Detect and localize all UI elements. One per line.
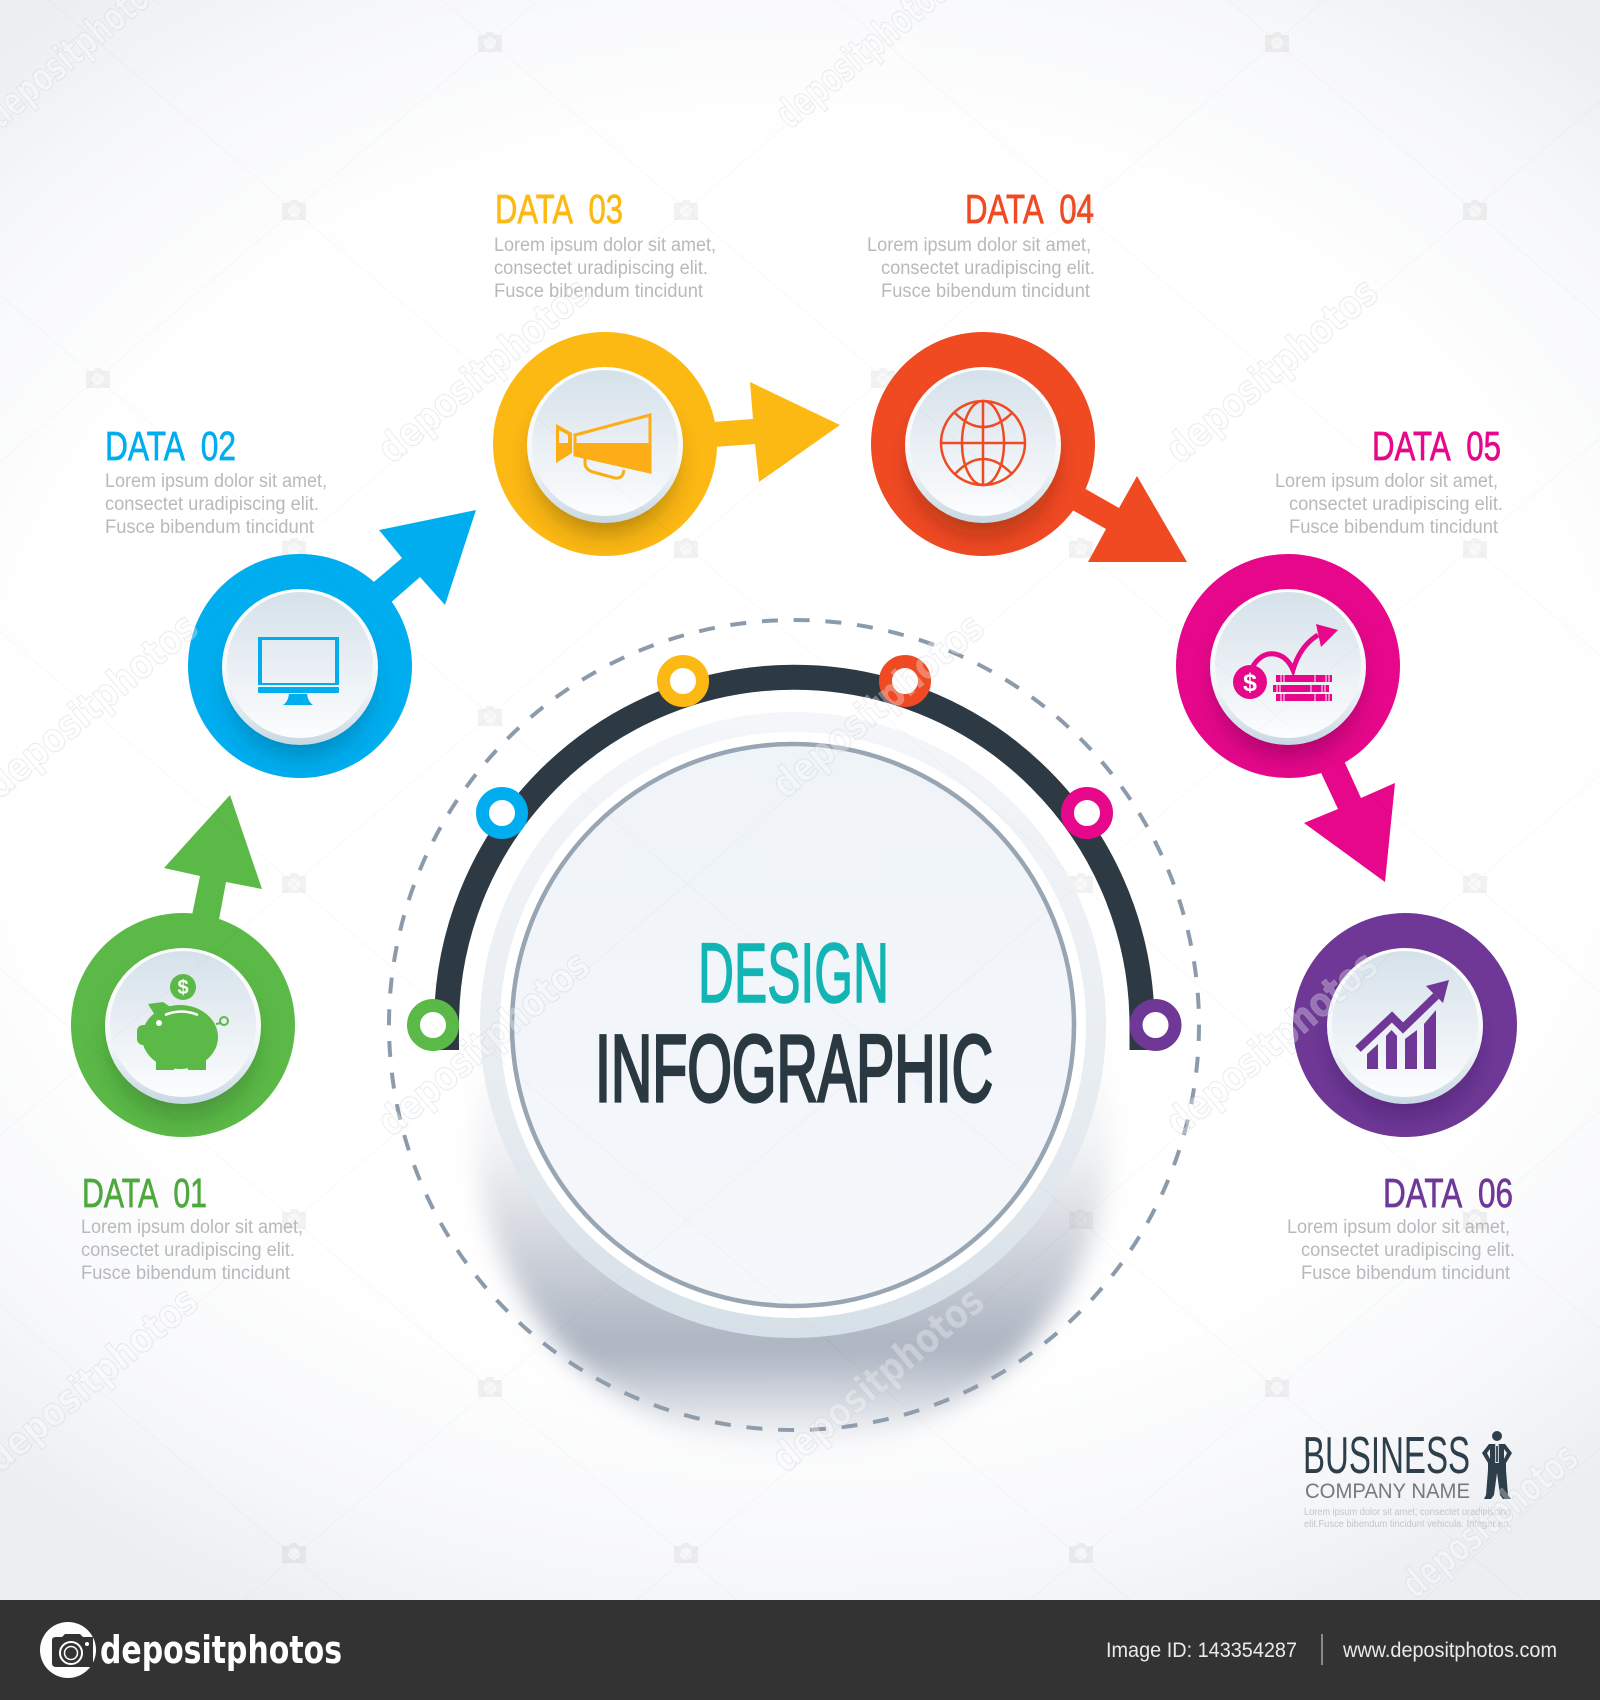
ring: green [71, 913, 295, 1137]
ring: yellow [493, 332, 717, 556]
ring: purple [1293, 913, 1517, 1137]
panel: data 02 [105, 423, 476, 778]
node: data 03 [664, 662, 702, 700]
ring shadow [911, 391, 1055, 535]
icon: coin growth [1233, 624, 1338, 701]
company block [1303, 1427, 1512, 1530]
stock watermark lettering: depositphotos [763, 1278, 993, 1482]
button [527, 367, 683, 523]
ring: blue [188, 554, 412, 778]
button [1210, 589, 1366, 745]
dashed outer circle [389, 620, 1199, 1430]
body text: consectet uradipiscing elit. [494, 258, 708, 279]
heading: DATA 05 [1372, 423, 1501, 469]
heading: DATA 06 [1383, 1170, 1513, 1216]
footer bar [0, 1600, 1600, 1700]
arrow: pink [1304, 752, 1395, 882]
arrow: blue [362, 510, 476, 612]
company small print: Lorem ipsum dolor sit amet, consectet uradipiscing [1304, 1507, 1511, 1518]
panel: data 06 [1287, 913, 1517, 1284]
ring shadow [103, 1028, 263, 1124]
company name: BUSINESS [1303, 1427, 1470, 1485]
button [105, 948, 261, 1104]
ring: pink [1176, 554, 1400, 778]
hub drop shadow [475, 812, 1111, 1448]
node: data 05 [1068, 794, 1106, 832]
footer logo mark [40, 1622, 96, 1678]
icon: growth chart [1358, 980, 1449, 1069]
title: INFOGRAPHIC [595, 1016, 993, 1122]
body text [1275, 471, 1503, 538]
stock watermark lettering: depositphotos [1157, 269, 1387, 473]
arrow: red [1060, 476, 1187, 562]
icon: coin growth: $ [1243, 669, 1257, 697]
stock watermark lettering: depositphotos [1157, 942, 1387, 1146]
body text: consectet uradipiscing elit. [881, 258, 1095, 279]
site url: www.depositphotos.com [1342, 1639, 1557, 1662]
body text [1287, 1217, 1515, 1284]
ring shadow [1326, 1034, 1484, 1123]
stock watermark camera marks [86, 32, 1487, 1563]
body text: Lorem ipsum dolor sit amet, [105, 471, 327, 492]
body text: Fusce bibendum tincidunt [1289, 517, 1499, 538]
heading: DATA 03 [495, 186, 623, 232]
central hub [389, 620, 1199, 1448]
panel: data 03 [493, 186, 840, 556]
node: data 01 [414, 1006, 452, 1044]
body text: Lorem ipsum dolor sit amet, [867, 235, 1091, 256]
body text: Lorem ipsum dolor sit amet, [81, 1217, 303, 1238]
outer disc [480, 712, 1106, 1338]
arrow: green [164, 795, 262, 925]
body text: consectet uradipiscing elit. [81, 1240, 295, 1261]
icon: megaphone [556, 415, 650, 478]
icon: globe [941, 401, 1025, 485]
ring shadow [533, 391, 677, 535]
panel: data 05 [1176, 423, 1503, 882]
heading: DATA 01 [82, 1170, 207, 1216]
body text [494, 235, 716, 302]
footer logo wordmark: depositphotos [100, 1628, 342, 1672]
body text: consectet uradipiscing elit. [1301, 1240, 1515, 1261]
body text: Lorem ipsum dolor sit amet, [494, 235, 716, 256]
body text: Fusce bibendum tincidunt [81, 1263, 291, 1284]
icon: monitor [258, 637, 339, 705]
panel: data 01 [71, 795, 303, 1284]
body text: Fusce bibendum tincidunt [881, 281, 1091, 302]
body text: consectet uradipiscing elit. [105, 494, 319, 515]
body text [867, 235, 1095, 302]
ring shadow [1205, 657, 1371, 768]
ring shadow [218, 659, 382, 768]
image id: Image ID: 143354287 [1106, 1639, 1297, 1662]
body text [81, 1217, 303, 1284]
heading: DATA 04 [965, 186, 1094, 232]
company small print: elit.Fusce bibendum tincidunt vehicula. Integer eu. [1304, 1519, 1511, 1530]
stock watermark lettering: depositphotos [369, 269, 599, 473]
icon: piggy bank [137, 974, 228, 1070]
icon: piggy bank: $ [177, 977, 189, 999]
dark timeline arc [446, 677, 1142, 1050]
heading: DATA 02 [105, 423, 236, 469]
ring: red [871, 332, 1095, 556]
button [905, 367, 1061, 523]
body text: Fusce bibendum tincidunt [1301, 1263, 1511, 1284]
white band [500, 732, 1086, 1318]
button [1327, 948, 1483, 1104]
inner disc with grey ring [512, 744, 1074, 1306]
company subtitle: COMPANY NAME [1305, 1480, 1470, 1503]
body text: Lorem ipsum dolor sit amet, [1287, 1217, 1510, 1238]
panel: data 04 [867, 186, 1187, 562]
footer divider [1321, 1634, 1323, 1665]
body text: Fusce bibendum tincidunt [105, 517, 315, 538]
stock watermark lettering: depositphotos [369, 942, 599, 1146]
title [595, 926, 993, 1122]
company small print [1304, 1507, 1511, 1530]
arrow: yellow [700, 382, 840, 482]
body text [105, 471, 327, 538]
icon: businessman [1482, 1431, 1512, 1499]
node: data 04 [886, 662, 924, 700]
body text: Fusce bibendum tincidunt [494, 281, 704, 302]
node: data 02 [482, 794, 522, 832]
button [222, 589, 378, 745]
stock watermark lettering: depositphotos [763, 604, 993, 808]
node: data 06 [1136, 1006, 1175, 1044]
title: DESIGN [698, 926, 889, 1020]
body text: consectet uradipiscing elit. [1289, 494, 1503, 515]
body text: Lorem ipsum dolor sit amet, [1275, 471, 1498, 492]
